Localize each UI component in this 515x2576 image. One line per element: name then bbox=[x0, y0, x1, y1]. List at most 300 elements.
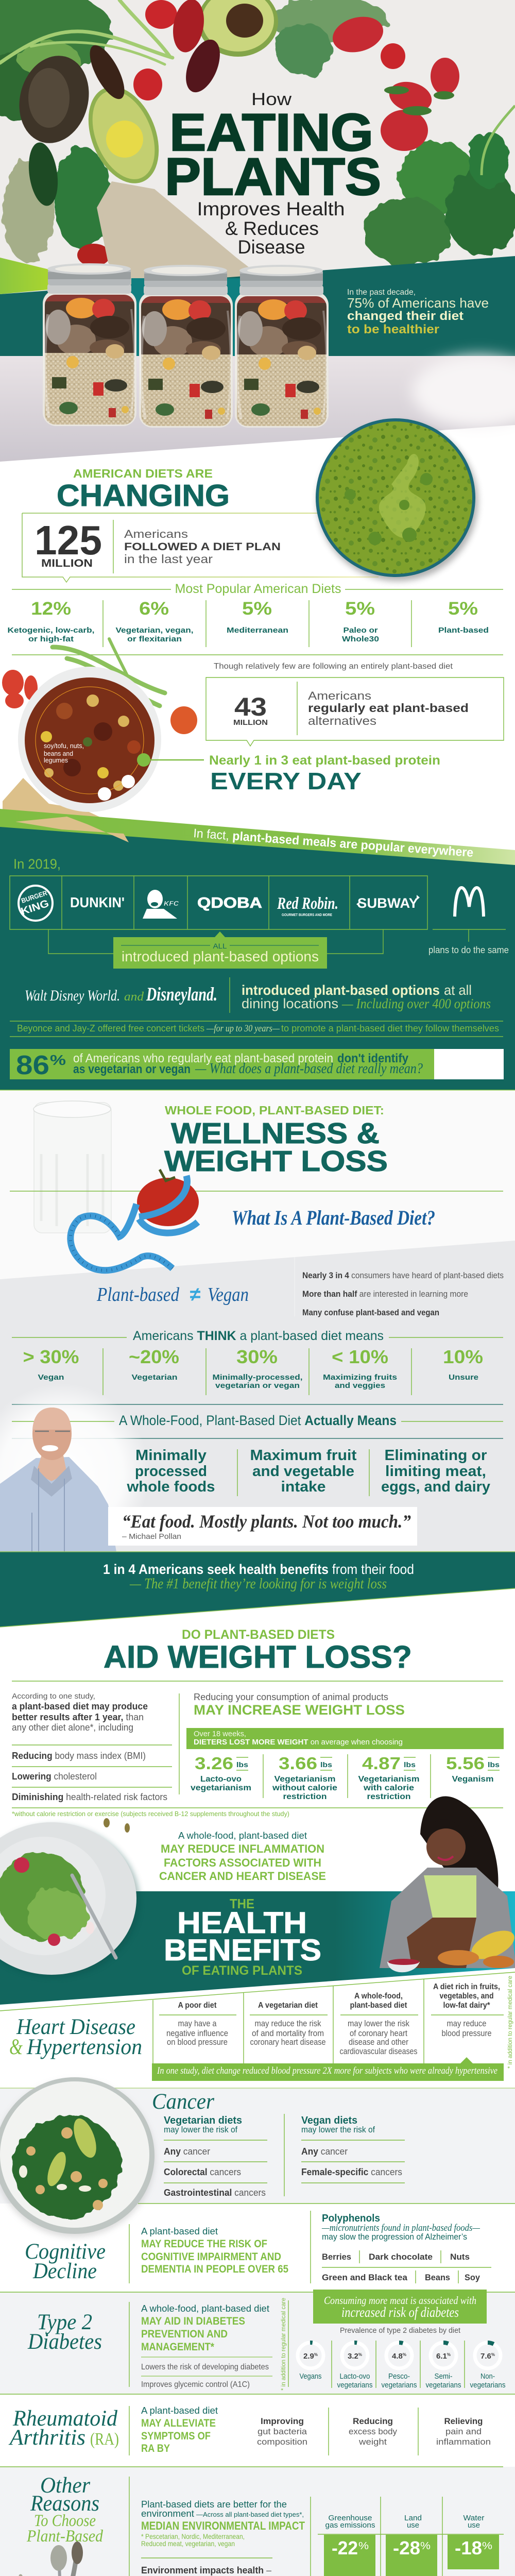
consumer facts list: More than half are interested in learning more bbox=[302, 1290, 468, 1299]
stat: vegetarian: ~20% bbox=[129, 1346, 179, 1367]
green box: meat and diabetes bbox=[313, 2290, 487, 2324]
heading: heart disease and hypertension: & bbox=[9, 2035, 23, 2059]
white fade on floor right bbox=[412, 355, 515, 428]
plant-based not equal vegan: ≠ bbox=[190, 1284, 201, 1306]
diabetes text bbox=[141, 2303, 272, 2389]
donut: vegans bbox=[297, 2342, 324, 2381]
Disney text: dining locations bbox=[242, 996, 338, 1011]
stat: unsure: 10% bbox=[443, 1346, 483, 1367]
bowl bbox=[18, 667, 161, 812]
donut: semi bbox=[425, 2343, 461, 2389]
jar 1 bbox=[43, 263, 136, 428]
stat: vegetarian without restriction: without calorie bbox=[272, 1784, 337, 1792]
arthritis: improving bbox=[257, 2416, 307, 2447]
callout: all introduced plant-based options: ALL bbox=[213, 942, 227, 950]
restaurant logos grid bbox=[10, 876, 427, 929]
logo: McDonald's arches bbox=[455, 888, 484, 917]
stat: vegetarian: Vegetarian bbox=[132, 1373, 177, 1382]
stat: vegan bbox=[23, 1346, 79, 1382]
study text block: any other diet alone*, including bbox=[12, 1722, 133, 1733]
meaning: whole foods: processed bbox=[135, 1463, 207, 1480]
polyphenols block: —micronutrients found in plant-based foods— bbox=[321, 2223, 480, 2233]
column: fruits and vegetables diet: may reduce bbox=[447, 2019, 486, 2028]
polyphenols block: Beans bbox=[425, 2273, 450, 2282]
stat: nearly 1 in 3 bbox=[209, 753, 440, 794]
environment text: MEDIAN ENVIRONMENTAL IMPACT bbox=[141, 2519, 305, 2532]
callout: all introduced plant-based options: introduced plant-based options bbox=[122, 948, 319, 964]
diet statistics columns bbox=[7, 599, 489, 647]
plant-based not equal vegan: Plant-based bbox=[96, 1284, 180, 1306]
donut: non-vegetarians: vegetarians bbox=[470, 2381, 506, 2389]
stat: vegetarian without restriction: Vegetarianism bbox=[274, 1775, 336, 1784]
stat: vegetarian bbox=[115, 599, 194, 643]
donut: pesco: % bbox=[403, 2352, 406, 2357]
stat: paleo bbox=[342, 599, 379, 643]
kale lower left bbox=[54, 147, 111, 250]
bar: land use: use bbox=[407, 2521, 419, 2530]
column: whole-food plant-based diet: A whole-food, bbox=[354, 1992, 403, 2001]
86 percent callout: % bbox=[50, 1052, 66, 1068]
diabetes text: Improves glycemic control (A1C) bbox=[141, 2380, 250, 2389]
arthritis: relieving bbox=[436, 2416, 491, 2447]
bowl label text: beans and bbox=[44, 750, 73, 757]
callout: 125 million: FOLLOWED A DIET PLAN bbox=[124, 541, 281, 553]
diabetes section background bbox=[0, 2292, 515, 2394]
column: vegetarian diet: of and mortality from bbox=[252, 2029, 324, 2038]
bar: greenhouse gas: % bbox=[358, 2540, 369, 2552]
green box: meat and diabetes: increased risk of diabetes bbox=[341, 2304, 459, 2320]
environment text: environment bbox=[141, 2508, 194, 2519]
cognitive decline text bbox=[141, 2226, 288, 2275]
cancer: vegan diets: may lower the risk of bbox=[301, 2125, 375, 2134]
study results list: Reducing body mass index (BMI) bbox=[12, 1751, 146, 1761]
photo: pesto bowl with spoons bbox=[0, 2541, 170, 2576]
stat: vegetarian with restriction: with calorie bbox=[363, 1784, 414, 1792]
kale stem right bbox=[482, 106, 515, 175]
cancer: vegetarian diets: Any cancer bbox=[164, 2146, 210, 2157]
bar: greenhouse gas: gas emissions bbox=[325, 2521, 375, 2530]
arthritis: reducing: excess body bbox=[349, 2427, 397, 2436]
arthritis: relieving: pain and bbox=[445, 2427, 482, 2436]
meaning: fruit and vegetable bbox=[250, 1447, 357, 1495]
stat: veganism: Veganism bbox=[452, 1775, 493, 1784]
study results list bbox=[12, 1745, 172, 1802]
meaning: whole foods bbox=[126, 1447, 215, 1495]
diabetes text: PREVENTION AND bbox=[141, 2328, 228, 2340]
study text block: According to one study, bbox=[12, 1692, 95, 1701]
hero statistic text: 75% of Americans have bbox=[347, 295, 489, 311]
inflammation text: FACTORS ASSOCIATED WITH bbox=[164, 1856, 321, 1869]
environment text: Plant-based diets are better for the bbox=[141, 2499, 287, 2510]
heading: heart disease and hypertension bbox=[9, 2015, 142, 2059]
stat: vegetarian with restriction: 4.87 bbox=[362, 1754, 401, 1773]
title word How: How bbox=[251, 90, 291, 109]
McDonald's plans note: plans to do the same bbox=[428, 945, 509, 955]
donut: vegans: 2.9 bbox=[303, 2352, 314, 2361]
Disney text: introduced plant-based options bbox=[242, 982, 440, 998]
stat: vegetarian: or flexitarian bbox=[127, 635, 182, 643]
question: what is a plant-based diet: What Is A Plant-Based Diet? bbox=[232, 1206, 435, 1229]
photo: green smoothie bbox=[316, 418, 478, 581]
stat: vegetarian without restriction bbox=[272, 1754, 337, 1801]
polyphenols block: Dark chocolate bbox=[369, 2252, 433, 2262]
stat: lacto-ovo: lbs bbox=[236, 1760, 248, 1769]
bar: land use bbox=[386, 2514, 437, 2576]
heading: the health benefits: OF EATING PLANTS bbox=[182, 1963, 302, 1978]
photo: salad plate bbox=[0, 1818, 139, 1977]
heading: wellness and weight loss: WEIGHT LOSS bbox=[164, 1145, 388, 1178]
column: vegetarian diet bbox=[250, 2001, 325, 2047]
cancer: vegetarian diets: Colorectal cancers bbox=[164, 2167, 241, 2177]
Disney logos: and bbox=[124, 990, 144, 1004]
heading: actually means: A Whole-Food, Plant-Based Diet Actually Means bbox=[119, 1413, 397, 1428]
heading: rheumatoid arthritis bbox=[8, 2406, 119, 2450]
hero title bbox=[165, 90, 381, 258]
cognitive decline text: COGNITIVE IMPAIRMENT AND bbox=[141, 2251, 281, 2263]
callout: 125 million: MILLION bbox=[41, 557, 93, 569]
bar: water use: % bbox=[482, 2540, 492, 2552]
arthritis: reducing: Reducing bbox=[353, 2416, 393, 2426]
polyphenols block bbox=[321, 2213, 491, 2283]
callout: 125 million: 125 bbox=[35, 517, 102, 563]
heading: cognitive decline: Cognitive bbox=[25, 2240, 106, 2264]
donut: pesco: Pesco- bbox=[388, 2372, 410, 2381]
hero statistic text: In the past decade, bbox=[347, 288, 416, 297]
86 percent callout: as vegetarian or vegan bbox=[73, 1062, 191, 1076]
quote: Michael Pollan: “Eat food. Mostly plants. Not too much.” bbox=[122, 1511, 411, 1532]
logo: Burger King bbox=[19, 886, 53, 921]
heading: other reasons: Other bbox=[40, 2473, 90, 2498]
bar: water use: Water bbox=[464, 2514, 484, 2522]
heading: cancer: Cancer bbox=[152, 2090, 214, 2114]
arthritis: improving: gut bacteria bbox=[258, 2427, 307, 2436]
study results list: Lowering cholesterol bbox=[12, 1771, 97, 1782]
cognitive decline text: A plant-based diet bbox=[141, 2226, 218, 2236]
green box: over 18 weeks: Over 18 weeks, bbox=[194, 1730, 246, 1738]
hero: marble background bbox=[0, 0, 515, 371]
stat: nearly 1 in 3: EVERY DAY bbox=[210, 768, 362, 794]
stat: ketogenic bbox=[7, 599, 95, 643]
stat: paleo: Whole30 bbox=[342, 635, 379, 643]
stat: lacto-ovo: 3.26 bbox=[195, 1754, 233, 1773]
polyphenols block: Berries bbox=[322, 2252, 351, 2262]
McDonald's plans note bbox=[428, 929, 509, 955]
column: vegetarian diet: may reduce the risk bbox=[254, 2019, 321, 2028]
cancer: vegan diets bbox=[301, 2115, 405, 2183]
bar: water use: -18 bbox=[455, 2537, 482, 2558]
title subtitle line 2: & Reduces bbox=[225, 218, 319, 239]
study text block: better results after 1 year, than bbox=[12, 1712, 144, 1722]
donut: pesco bbox=[381, 2343, 417, 2389]
Beyonce fact: Beyonce and Jay-Z offered free concert tickets bbox=[17, 1023, 204, 1033]
heading: other reasons: To Choose bbox=[34, 2512, 96, 2530]
green box: over 18 weeks bbox=[186, 1728, 504, 1749]
strawberry leaves bbox=[384, 86, 454, 115]
meaning: limiting meat bbox=[381, 1447, 490, 1495]
jar 3 bbox=[235, 265, 329, 429]
tortilla chips bbox=[3, 778, 129, 837]
diabetes text: Lowers the risk of developing diabetes bbox=[141, 2363, 269, 2371]
stat: fruits and veggies: < 10% bbox=[332, 1346, 388, 1367]
hero statistic text bbox=[347, 288, 489, 336]
stat: plant-based bbox=[438, 599, 489, 635]
bracket connecting logos bbox=[48, 929, 383, 954]
paper bag bbox=[97, 181, 250, 289]
bowl label text: soy/tofu, nuts, bbox=[44, 742, 84, 750]
inflammation text: MAY REDUCE INFLAMMATION bbox=[161, 1842, 324, 1855]
callout: 43 million: regularly eat plant-based bbox=[308, 701, 469, 715]
logo: KFC colonel bbox=[143, 890, 179, 919]
Beyonce fact: to promote a plant-based diet they follow themselves bbox=[281, 1023, 499, 1033]
stat: vegetarian with restriction: lbs bbox=[404, 1760, 416, 1769]
stat: minimally processed: 30% bbox=[236, 1346, 278, 1367]
heading: rheumatoid arthritis: (RA) bbox=[90, 2430, 119, 2449]
cancer: vegan diets: Vegan diets bbox=[301, 2115, 357, 2126]
diabetes text: MANAGEMENT* bbox=[141, 2341, 215, 2353]
stat: vegetarian without restriction: 3.66 bbox=[279, 1754, 317, 1773]
stat: nearly 1 in 3: Nearly 1 in 3 eat plant-based protein bbox=[209, 753, 440, 768]
environment text bbox=[141, 2499, 305, 2576]
label: in 2019: In 2019, bbox=[13, 856, 61, 872]
stat: vegetarian without restriction: restriction bbox=[283, 1792, 327, 1801]
stat: minimally processed: Minimally-processed, bbox=[212, 1373, 303, 1382]
teal restaurants panel bbox=[0, 827, 515, 1090]
heading: wellness and weight loss: WHOLE FOOD, PLANT-BASED DIET: bbox=[165, 1104, 384, 1117]
portrait: Michael Pollan bbox=[0, 1408, 116, 1552]
callout: 125 million: in the last year bbox=[124, 552, 213, 566]
donut: pesco: 4.8 bbox=[392, 2352, 403, 2361]
rheumatoid arthritis text: SYMPTOMS OF bbox=[141, 2430, 211, 2442]
column: poor diet: negative influence bbox=[166, 2029, 228, 2038]
kale stems bbox=[0, 0, 173, 64]
bar: land use: -28 bbox=[393, 2537, 420, 2558]
logo: KFC colonel: KFC bbox=[164, 900, 179, 907]
polyphenols block: Polyphenols bbox=[322, 2213, 380, 2224]
Beyonce fact bbox=[10, 1021, 503, 1037]
strawberries bbox=[329, 11, 459, 151]
stat: plant-based: Plant-based bbox=[438, 626, 489, 635]
environment text: * Pescetarian, Nordic, Mediterranean, bbox=[141, 2532, 245, 2540]
stat: minimally processed bbox=[212, 1346, 303, 1390]
consumer facts list: Nearly 3 in 4 consumers have heard of plant-based diets bbox=[302, 1271, 504, 1280]
white marker dots bbox=[98, 775, 135, 801]
half avocado left bbox=[75, 76, 172, 194]
meaning: limiting meat: Eliminating or bbox=[384, 1447, 487, 1464]
green onions bbox=[53, 639, 165, 721]
callout: all introduced plant-based options bbox=[113, 931, 327, 969]
heading: most popular American diets: Most Popular American Diets bbox=[175, 582, 341, 596]
donut: vegans: % bbox=[314, 2352, 318, 2357]
stat: vegan: Vegan bbox=[38, 1373, 64, 1382]
photo: tomato with measuring tape bbox=[71, 1170, 199, 1270]
mason jars bbox=[43, 263, 329, 429]
orange orbit ring bbox=[36, 687, 144, 794]
column: whole-food plant-based diet: disease and other bbox=[349, 2038, 408, 2047]
stat: paleo: Paleo or bbox=[343, 626, 378, 635]
callout: 43 million bbox=[206, 677, 504, 746]
logo: Subway: SUBWAY bbox=[357, 895, 418, 911]
health benefits teal banner bbox=[0, 1891, 515, 2005]
heading: may increase weight loss: MAY INCREASE WEIGHT LOSS bbox=[194, 1702, 405, 1718]
quote: Michael Pollan bbox=[108, 1507, 417, 1546]
heading: heart disease and hypertension: Hypertension bbox=[26, 2035, 142, 2059]
heading: cognitive decline bbox=[25, 2240, 106, 2283]
stat: mediterranean bbox=[227, 599, 288, 635]
heading: the health benefits bbox=[164, 1896, 321, 1978]
bar: greenhouse gas: -22 bbox=[332, 2537, 358, 2558]
logo: Dunkin: DUNKIN' bbox=[70, 894, 125, 910]
whole tomato bbox=[170, 706, 197, 734]
stat: mediterranean: Mediterranean bbox=[227, 626, 288, 635]
stat: plant-based: 5% bbox=[448, 599, 478, 619]
column: vegetarian diet: coronary heart disease bbox=[250, 2038, 325, 2047]
environment text: Environment impacts health – bbox=[141, 2565, 271, 2575]
column: whole-food plant-based diet: plant-based diet bbox=[350, 2001, 407, 2010]
heading rules: actually means bbox=[12, 1404, 503, 1438]
cancer: vegetarian diets: Gastrointestinal cancers bbox=[164, 2188, 266, 2198]
cancer: vegetarian diets bbox=[164, 2115, 267, 2198]
heading: rheumatoid arthritis: Rheumatoid bbox=[12, 2406, 117, 2431]
column: poor diet bbox=[166, 2001, 228, 2047]
donut: lacto-ovo: % bbox=[358, 2352, 362, 2357]
stat: vegetarian: 6% bbox=[139, 599, 169, 619]
heading: rheumatoid arthritis: Arthritis bbox=[8, 2426, 85, 2450]
stat: paleo: 5% bbox=[345, 599, 375, 619]
column: vegetarian diet: A vegetarian diet bbox=[258, 2001, 318, 2010]
title PLANTS: PLANTS bbox=[165, 147, 381, 206]
cancer: vegetarian diets: Vegetarian diets bbox=[164, 2115, 242, 2126]
teal banner: health benefits from food: 1 in 4 Americans seek health benefits from their food bbox=[103, 1562, 414, 1577]
hero food photo: vegetables and fruit bbox=[0, 0, 515, 289]
stat: ketogenic: 12% bbox=[31, 599, 71, 619]
inflammation text bbox=[159, 1831, 326, 1883]
bar: greenhouse gas: Greenhouse bbox=[329, 2514, 372, 2522]
callout: 125 million: Americans bbox=[124, 528, 188, 540]
arthritis: reducing bbox=[349, 2416, 397, 2447]
section heading: American diets are changing: CHANGING bbox=[57, 479, 230, 513]
bar: water use bbox=[448, 2514, 499, 2569]
stat: fruits and veggies bbox=[323, 1346, 397, 1390]
heading: the health benefits: THE bbox=[230, 1896, 254, 1911]
86 percent callout: — What does a plant-based diet really mean? bbox=[195, 1061, 423, 1077]
title EATING: EATING bbox=[169, 103, 373, 162]
donut: lacto-ovo: 3.2 bbox=[348, 2352, 358, 2361]
bar: greenhouse gas bbox=[324, 2514, 375, 2576]
callout: 43 million: Americans bbox=[308, 689, 371, 702]
chart caption: Prevalence of type 2 diabetes by diet bbox=[340, 2326, 461, 2335]
teal band with green corner bbox=[0, 256, 515, 356]
stat: ketogenic: Ketogenic, low-carb, bbox=[7, 626, 95, 635]
column: whole-food plant-based diet: of coronary heart bbox=[350, 2029, 407, 2038]
donut: semi: 6.1 bbox=[436, 2352, 447, 2361]
study text block: a plant-based diet may produce bbox=[12, 1701, 148, 1711]
stat: veganism: 5.56 bbox=[446, 1754, 485, 1773]
hero statistic text: to be healthier bbox=[347, 323, 439, 336]
spoons bbox=[21, 2548, 77, 2576]
stat: veganism bbox=[446, 1754, 500, 1784]
heading: wellness and weight loss: WELLNESS & bbox=[171, 1117, 380, 1150]
column: whole-food plant-based diet bbox=[340, 1992, 417, 2056]
Disney logos: Disneyland. bbox=[146, 984, 217, 1005]
callout: 43 million: alternatives bbox=[308, 714, 376, 727]
title subtitle line 1: Improves Health bbox=[197, 198, 345, 219]
consumer facts list: Many confuse plant-based and vegan bbox=[302, 1308, 439, 1317]
green slanted band bbox=[0, 809, 515, 866]
meaning: limiting meat: limiting meat, bbox=[385, 1463, 486, 1480]
heading: other reasons: Plant-Based bbox=[26, 2527, 103, 2546]
heading: other reasons bbox=[26, 2473, 103, 2546]
bar chart: environmental impact bbox=[311, 2497, 504, 2576]
stat: ketogenic: or high-fat bbox=[28, 635, 74, 643]
green box: meat and diabetes: Consuming more meat is associated with bbox=[324, 2294, 476, 2307]
Disney text: — Including over 400 options bbox=[341, 996, 491, 1011]
stat: vegetarian bbox=[129, 1346, 179, 1382]
slanted band text: In fact, plant-based meals are popular everywhere bbox=[193, 826, 474, 860]
stat: minimally processed: vegetarian or vegan bbox=[215, 1381, 300, 1390]
donut: non-vegetarians: Non- bbox=[480, 2372, 495, 2381]
arthritis: improving: Improving bbox=[261, 2416, 304, 2426]
heading: cognitive decline: Decline bbox=[32, 2259, 97, 2283]
Disney logos bbox=[25, 984, 217, 1005]
meaning: fruit and vegetable: Maximum fruit bbox=[250, 1447, 357, 1464]
cognitive decline text: MAY REDUCE THE RISK OF bbox=[141, 2238, 267, 2250]
column: fruits and vegetables diet: blood pressure bbox=[442, 2029, 491, 2038]
donut: non-vegetarians: 7.6 bbox=[480, 2352, 491, 2361]
heading: the health benefits: HEALTH bbox=[177, 1906, 307, 1940]
donut: semi: Semi- bbox=[435, 2372, 453, 2381]
diabetes text: MAY AID IN DIABETES bbox=[141, 2315, 245, 2327]
footnote: *without calorie restriction or exercise (subjects received B-12 supplements throughout the study) bbox=[12, 1810, 289, 1818]
kale top left bbox=[0, 0, 113, 118]
plant-based not equal vegan bbox=[96, 1284, 249, 1306]
inflammation text: A whole-food, plant-based diet bbox=[178, 1831, 307, 1841]
bowl label text bbox=[44, 742, 84, 764]
photo: woman preparing food bbox=[380, 1796, 515, 1972]
bar: land use: % bbox=[420, 2540, 431, 2552]
logo: Red Robin: Red Robin. bbox=[277, 894, 338, 913]
kale right bbox=[363, 131, 515, 265]
green bar: hypertensive study bbox=[152, 2057, 504, 2081]
column: fruits and vegetables diet: A diet rich in fruits, bbox=[433, 1982, 500, 1991]
think statistics columns bbox=[23, 1346, 483, 1395]
stat: vegetarian with restriction: Vegetarianism bbox=[358, 1775, 419, 1784]
arthritis: improving: composition bbox=[257, 2437, 307, 2447]
column: poor diet: on blood pressure bbox=[167, 2038, 228, 2047]
cancer section background bbox=[0, 2088, 515, 2204]
stat: lacto-ovo bbox=[191, 1754, 251, 1792]
meaning: limiting meat: eggs, and dairy bbox=[381, 1479, 490, 1495]
heading: may increase weight loss bbox=[194, 1692, 405, 1718]
environment text: Reduced meat, vegetarian, vegan bbox=[141, 2539, 235, 2548]
thyme sprigs bbox=[3, 160, 54, 263]
donut: semi: % bbox=[447, 2352, 451, 2357]
stat: vegetarian with restriction bbox=[358, 1754, 419, 1801]
donut charts: diabetes prevalence by diet bbox=[297, 2341, 506, 2389]
stat: vegetarian: Vegetarian, vegan, bbox=[115, 626, 194, 635]
photo: glass of water bbox=[33, 1101, 111, 1233]
heading: other reasons: Reasons bbox=[30, 2492, 99, 2516]
peppers bbox=[25, 0, 227, 266]
stat: vegetarian with restriction: restriction bbox=[367, 1792, 411, 1801]
whole dark avocado bbox=[10, 48, 98, 151]
half avocado top bbox=[198, 0, 278, 57]
section heading: American diets are changing: AMERICAN DIETS ARE bbox=[73, 467, 213, 480]
polyphenols block: Green and Black tea bbox=[322, 2273, 408, 2282]
polyphenols block: may slow the progression of Alzheimer’s bbox=[322, 2232, 467, 2242]
86 percent callout: 86 bbox=[16, 1050, 49, 1080]
stat: unsure bbox=[443, 1346, 483, 1382]
heading: wellness and weight loss bbox=[164, 1104, 388, 1178]
